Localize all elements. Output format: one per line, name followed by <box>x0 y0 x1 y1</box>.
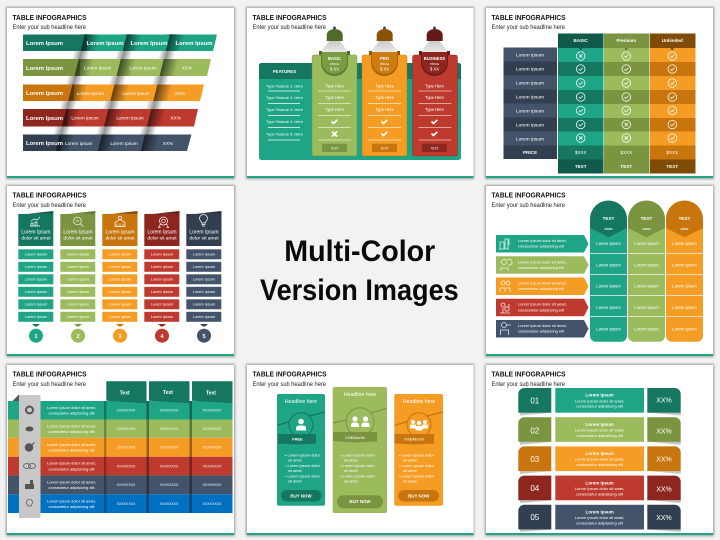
card: team: XX$/Month <box>404 436 424 442</box>
cell values: Lorem Ipsum <box>176 41 212 47</box>
center title <box>260 235 459 307</box>
feature dividers <box>268 90 300 140</box>
column 3: Lorem Ipsum <box>109 265 131 269</box>
row descriptions: consectetur adipisicing elit <box>49 429 95 434</box>
arrow icons <box>499 239 512 335</box>
row 05 <box>518 505 681 530</box>
column 4: Lorem Ipsum <box>147 230 177 236</box>
column: basic <box>558 34 604 174</box>
column text teal: Lorem Ipsum <box>596 305 621 310</box>
row 03: Lorem Ipsum <box>585 451 614 456</box>
row 01: 01 <box>530 396 540 406</box>
card: monthly: XX$/Month <box>345 435 365 440</box>
cell values: XX% <box>182 65 192 70</box>
row 01: XX% <box>656 398 672 404</box>
column 1: Lorem Ipsum <box>25 278 47 282</box>
sub headline: Enter your sub headline here <box>492 382 566 388</box>
plan: business: Type Here <box>425 107 445 112</box>
feature list: Type Feature 4: Here <box>266 119 303 124</box>
column: basic: TEXT <box>575 164 587 169</box>
column text green <box>628 200 665 342</box>
column 4: Lorem Ipsum <box>151 303 173 307</box>
column 2: Lorem Ipsum <box>67 265 89 269</box>
row descriptions: Lorem Ipsum dolor sit amet, <box>47 461 96 466</box>
row labels column: Lorem Ipsum <box>516 108 544 114</box>
arrow text <box>518 238 567 334</box>
color rows <box>8 401 232 513</box>
column text green: TEXT <box>641 216 653 221</box>
column 3: Lorem Ipsum <box>105 230 135 236</box>
plan: basic: Type Here <box>325 84 345 88</box>
card: monthly: BUY NOW <box>349 499 371 504</box>
column text teal: Lorem Ipsum <box>596 241 621 246</box>
card: monthly: sit amet <box>344 479 359 484</box>
column 2: dolor sit amet <box>63 236 93 242</box>
column 3: Lorem Ipsum <box>109 278 131 282</box>
plan: basic: Type Here <box>325 95 345 100</box>
cell values <box>117 408 222 506</box>
cell values: XXXXXXXX <box>117 408 136 412</box>
sub headline: Enter your sub headline here <box>252 382 327 388</box>
column text orange: Lorem Ipsum <box>672 262 697 268</box>
row labels column: Lorem Ipsum <box>516 80 544 86</box>
plan: pro: Type Here <box>375 95 395 100</box>
header columns: Text <box>163 390 173 396</box>
row labels column: Lorem Ipsum <box>516 66 544 72</box>
sub headline: Enter your sub headline here <box>492 203 566 209</box>
row 05: 05 <box>530 513 540 522</box>
heading: TABLE INFOGRAPHICS <box>12 13 86 22</box>
row 01: consectetur adipisicing elit <box>576 404 624 409</box>
row descriptions <box>47 405 96 509</box>
card: free: sit amet <box>288 458 303 463</box>
plan: pro: TEXT <box>380 146 389 150</box>
cell values: XXXXXXXX <box>203 427 222 431</box>
sub headline: Enter your sub headline here <box>252 25 327 31</box>
row labels: Lorem Ipsum <box>26 66 63 72</box>
card: free: sit amet <box>288 468 303 473</box>
plan: basic: TEXT <box>330 146 339 150</box>
row 05: Lorem Ipsum dolor sit amet, <box>575 515 624 520</box>
row 01: Lorem Ipsum dolor sit amet, <box>575 398 624 403</box>
sub headline: Enter your sub headline here <box>12 382 87 388</box>
column 5 <box>186 211 222 343</box>
arrow text: Lorem Ipsum dolor sit amet, <box>518 238 567 243</box>
plan: basic: $ XX <box>330 66 339 72</box>
row 03: XX% <box>656 456 672 464</box>
card: free: BUY NOW <box>290 493 312 498</box>
card: team: • Lorem Ipsum dolor <box>399 452 435 458</box>
column 5: 5 <box>202 334 206 340</box>
plan: basic: BASIC <box>328 56 341 61</box>
column text teal: TEXT <box>603 216 615 221</box>
row 05: XX% <box>656 515 672 522</box>
column 1: Lorem Ipsum <box>25 315 47 319</box>
column 1: Lorem Ipsum <box>25 253 47 257</box>
cell values: Lorem Ipsum <box>116 116 144 121</box>
row 04: 04 <box>530 484 540 493</box>
arrow text: consectetur adipisicing elit <box>518 286 565 291</box>
column 5: Lorem Ipsum <box>193 290 215 294</box>
column 5: Lorem Ipsum <box>193 315 215 319</box>
card: monthly: sit amet <box>344 468 359 473</box>
column 5: Lorem Ipsum <box>189 230 219 236</box>
card: team: Headline here <box>403 399 435 405</box>
sub headline: Enter your sub headline here <box>492 25 566 31</box>
column text green: Lorem Ipsum <box>634 326 659 332</box>
plan: business: Type Here <box>425 95 445 100</box>
column: premium: $XXX <box>620 150 632 155</box>
column 2 <box>60 211 95 343</box>
column 5: dolor sit amet <box>189 236 219 242</box>
row descriptions: consectetur adipisicing elit <box>49 448 95 452</box>
column 3: Lorem Ipsum <box>109 303 131 307</box>
check and cross icons <box>576 52 677 142</box>
plan: business <box>412 26 458 156</box>
wedge shadows <box>520 413 681 532</box>
card: monthly: sit amet <box>344 458 359 463</box>
card: monthly <box>333 387 387 513</box>
column 5: Lorem Ipsum <box>193 265 215 269</box>
column text teal: Lorem Ipsum <box>596 262 621 268</box>
column: unlimited: TEXT <box>666 164 678 169</box>
column: premium <box>604 34 650 174</box>
row labels: Lorem Ipsum <box>26 141 63 147</box>
cell values: XX% <box>170 116 181 121</box>
sub headline: Enter your sub headline here <box>12 25 87 31</box>
column text teal: Lorem Ipsum <box>596 326 621 332</box>
row descriptions: Lorem Ipsum dolor sit amet, <box>47 442 96 447</box>
heading: TABLE INFOGRAPHICS <box>492 13 566 22</box>
column 4: Lorem Ipsum <box>151 315 173 319</box>
row 04: Lorem Ipsum dolor sit amet, <box>575 486 624 491</box>
panel: pricing lamps table <box>246 7 474 179</box>
column: premium: TEXT <box>620 164 632 169</box>
column text orange: Lorem Ipsum <box>672 305 697 310</box>
heading: TABLE INFOGRAPHICS <box>492 370 566 379</box>
row descriptions: Lorem Ipsum dolor sit amet, <box>47 423 96 428</box>
features table background: FEATURES <box>273 69 296 74</box>
panel: pricing cards <box>246 364 474 536</box>
column 1 <box>18 211 53 343</box>
column 1: Lorem Ipsum <box>25 265 47 269</box>
column 4: Lorem Ipsum <box>151 253 173 257</box>
cell values: XXXXXXXX <box>203 464 222 468</box>
column: premium: Premium <box>616 38 636 43</box>
cell values: Lorem Ipsum <box>77 91 104 96</box>
cell values: XX% <box>175 91 185 96</box>
row 04: Lorem Ipsum <box>585 480 614 485</box>
cell values: XXXXXXXX <box>160 427 179 431</box>
column 4: dolor sit amet <box>147 236 177 242</box>
panel: five numbered columns <box>6 185 235 357</box>
column 3: dolor sit amet <box>105 236 135 242</box>
plan: business: Type Here <box>425 84 445 88</box>
card: monthly: • Lorem Ipsum dolor <box>340 463 376 468</box>
column 4: Lorem Ipsum <box>151 265 173 269</box>
features table background <box>259 63 461 160</box>
fold shadows between rows <box>49 34 180 151</box>
row 03: 03 <box>530 455 540 464</box>
column 1: Lorem Ipsum <box>25 290 47 294</box>
heading: TABLE INFOGRAPHICS <box>252 13 326 22</box>
plan: pro: Type Here <box>375 84 395 88</box>
plan: business: TEXT <box>430 146 439 150</box>
column 4: 4 <box>160 334 164 340</box>
column text green: Lorem Ipsum <box>634 305 659 310</box>
cell values: Lorem Ipsum <box>86 41 124 47</box>
plan: pro: $ XX <box>380 66 389 72</box>
panel: checklist comparison table <box>485 7 714 179</box>
column 4: Lorem Ipsum <box>151 278 173 282</box>
row 04 <box>518 476 681 500</box>
cell values: XXXXXXXX <box>203 408 222 412</box>
row labels column: Lorem Ipsum <box>516 136 544 142</box>
plan: basic <box>312 26 357 156</box>
row labels column <box>504 48 557 159</box>
cell values: XXXXXXXX <box>117 464 136 468</box>
plan: business: PRICE <box>430 62 439 66</box>
arrow text: consectetur adipisicing elit <box>518 329 565 334</box>
row 04: consectetur adipisicing elit <box>576 491 624 496</box>
card: monthly: Headline here <box>344 392 376 398</box>
card: free: • Lorem Ipsum dolor <box>285 452 321 458</box>
column 2: Lorem Ipsum <box>63 230 93 236</box>
header columns: Text <box>120 390 130 396</box>
panel: full-width colored rows <box>6 364 235 536</box>
arrow text: consectetur adipisicing elit <box>518 244 565 249</box>
cell values: XXXXXXXX <box>117 427 136 431</box>
row 02: XX% <box>656 428 672 436</box>
feature list: Type Feature 1: Here <box>266 84 303 88</box>
column 3: Lorem Ipsum <box>109 290 131 294</box>
column 2: 2 <box>76 334 80 340</box>
cell values: XXXXXXXX <box>160 464 179 468</box>
cell values: Lorem Ipsum <box>110 141 138 146</box>
column: basic: BASIC <box>574 38 589 43</box>
cell values: XXXXXXXX <box>117 483 136 487</box>
row labels: Lorem Ipsum <box>26 91 63 97</box>
column 3 <box>102 211 138 343</box>
column 5: Lorem Ipsum <box>193 278 215 282</box>
column 3: Lorem Ipsum <box>109 315 131 319</box>
header columns: Text <box>206 390 216 396</box>
column: unlimited: Unlimited <box>662 38 683 43</box>
row 05: consectetur adipisicing elit <box>576 520 624 526</box>
arrow text: Lorem Ipsum dolor sit amet, <box>518 259 567 264</box>
arrow text: consectetur adipisicing elit <box>518 265 565 270</box>
fold corner <box>12 394 19 401</box>
cell values: XX% <box>163 141 173 146</box>
column 5: Lorem Ipsum <box>193 303 215 307</box>
card: team: • Lorem Ipsum dolor <box>399 463 435 468</box>
plan: basic: PRICE <box>330 62 339 66</box>
column text teal <box>590 201 627 342</box>
panel: numbered rows with percentages <box>485 364 714 536</box>
cell values: XXXXXXXX <box>160 446 179 450</box>
column text green: Lorem Ipsum <box>634 241 659 246</box>
arrow rows <box>496 235 588 338</box>
row 03: consectetur adipisicing elit <box>576 462 624 467</box>
column text orange: TEXT <box>679 216 691 221</box>
column 2: Lorem Ipsum <box>67 290 89 294</box>
row 01: Lorem Ipsum <box>585 393 614 398</box>
column 1: dolor sit amet <box>21 236 51 242</box>
feature list: Type Feature 3: Here <box>266 107 303 112</box>
panel: arrows into domed columns <box>485 185 714 357</box>
row descriptions: consectetur adipisicing elit <box>49 485 95 490</box>
row descriptions: consectetur adipisicing elit <box>49 504 95 509</box>
row 02: consectetur adipisicing elit <box>576 433 624 438</box>
feature list: Type Feature 2: Here <box>266 95 303 100</box>
plan: business: $ XX <box>430 66 439 72</box>
column: basic: $XXX <box>575 150 587 155</box>
colored rows <box>23 34 217 151</box>
column text orange <box>666 200 703 342</box>
card: free: • Lorem Ipsum dolor <box>285 463 321 468</box>
card: monthly: • Lorem Ipsum dolor <box>340 452 376 458</box>
feature list <box>266 84 303 136</box>
row labels <box>26 41 63 147</box>
card: team: • Lorem Ipsum dolor <box>399 474 435 478</box>
column 4: Lorem Ipsum <box>151 290 173 294</box>
cell values: XXXXXXXX <box>203 446 222 450</box>
row 01 <box>518 388 681 413</box>
column: unlimited: $XXX <box>666 150 678 155</box>
card: team <box>394 394 443 506</box>
plan: business: BUSINESS <box>424 56 445 61</box>
column 2: Lorem Ipsum <box>67 278 89 282</box>
cell values: XXXXXXXX <box>160 502 179 506</box>
column 4 <box>144 211 180 343</box>
cell values: XXXXXXXX <box>160 483 179 487</box>
card: free: sit amet <box>288 479 303 484</box>
gray icon strip <box>19 395 40 518</box>
plan: pro: PRICE <box>380 62 389 66</box>
row labels: Lorem Ipsum <box>26 41 63 47</box>
row labels column: Lorem Ipsum <box>516 52 544 58</box>
column 2: Lorem Ipsum <box>67 253 89 257</box>
row descriptions: consectetur adipisicing elit <box>49 410 95 416</box>
header columns <box>106 381 232 403</box>
center title: Version Images <box>260 274 459 307</box>
row descriptions: Lorem Ipsum dolor sit amet, <box>47 498 96 503</box>
row 04: XX% <box>656 486 672 494</box>
column 1: Lorem Ipsum <box>25 303 47 307</box>
cell values: Lorem Ipsum <box>122 91 150 96</box>
cell values: Lorem Ipsum <box>130 41 168 47</box>
heading: TABLE INFOGRAPHICS <box>252 370 326 379</box>
feature list: Type Feature 5: Here <box>266 132 303 136</box>
arrow text: Lorem Ipsum dolor sit amet, <box>518 302 567 307</box>
card: free: • Lorem Ipsum dolor <box>285 474 321 478</box>
plan: pro: Type Here <box>375 107 395 112</box>
column 2: Lorem Ipsum <box>67 315 89 319</box>
column 2: Lorem Ipsum <box>67 303 89 307</box>
plan: pro: PRO <box>380 56 390 61</box>
cell values: Lorem Ipsum <box>65 141 92 146</box>
heading: TABLE INFOGRAPHICS <box>12 370 86 379</box>
sub headline: Enter your sub headline here <box>12 203 87 209</box>
column shadows <box>104 401 192 513</box>
row 05: Lorem Ipsum <box>585 510 614 514</box>
cell values: XXXXXXXX <box>203 483 222 487</box>
column 1: 1 <box>34 334 38 340</box>
column 3: Lorem Ipsum <box>109 253 131 257</box>
heading: TABLE INFOGRAPHICS <box>12 191 86 200</box>
plan: pro <box>362 26 407 156</box>
column text orange: Lorem Ipsum <box>672 241 697 246</box>
column 1: Lorem Ipsum <box>21 230 51 236</box>
column text teal: Lorem Ipsum <box>596 284 621 288</box>
column 5: Lorem Ipsum <box>193 253 215 257</box>
cell values: Lorem Ipsum <box>84 65 111 70</box>
column text orange: Lorem Ipsum <box>672 284 697 288</box>
column 3: 3 <box>118 334 122 340</box>
row 02: Lorem Ipsum <box>585 422 614 427</box>
card: team: sit amet, <box>403 479 418 484</box>
arrow text: Lorem Ipsum dolor sit amet, <box>518 323 567 328</box>
card: free: Headline here <box>285 399 317 405</box>
card: team: BUY NOW <box>408 493 430 498</box>
row descriptions: Lorem Ipsum dolor sit amet, <box>47 405 96 410</box>
column text green: Lorem Ipsum <box>634 284 659 288</box>
row descriptions: consectetur adipisicing elit <box>49 466 95 471</box>
column text orange: Lorem Ipsum <box>672 326 697 332</box>
row labels column: Lorem Ipsum <box>516 94 544 100</box>
column: unlimited <box>650 34 696 174</box>
cell values: XXXXXXXX <box>203 502 222 506</box>
row 02 <box>518 417 681 442</box>
arrow text: consectetur adipisicing elit <box>518 307 565 312</box>
heading: TABLE INFOGRAPHICS <box>492 191 566 200</box>
row 03 <box>518 446 681 471</box>
column text green: Lorem Ipsum <box>634 262 659 268</box>
plan: basic: Type Here <box>325 107 345 112</box>
cell values: XXXXXXXX <box>160 408 179 412</box>
row 02: Lorem Ipsum dolor sit amet, <box>575 428 624 432</box>
row labels column: Lorem Ipsum <box>516 122 544 128</box>
panel: slanted table <box>6 7 235 179</box>
cell values: Lorem Ipsum <box>71 116 99 121</box>
dark left cells and folds <box>23 34 185 152</box>
row labels column: PRICE <box>523 150 537 155</box>
cell values: Lorem Ipsum <box>129 65 157 70</box>
arrow text: Lorem Ipsum dolor sit amet, <box>518 280 567 285</box>
row descriptions: Lorem Ipsum dolor sit amet, <box>47 480 96 484</box>
row 02: 02 <box>530 426 540 436</box>
center title: Multi-Color <box>284 235 436 268</box>
card: monthly: • Lorem Ipsum dolor <box>340 474 376 478</box>
card: team: sit amet <box>403 468 418 473</box>
card: free <box>277 394 325 506</box>
row 03: Lorem Ipsum dolor sit amet, <box>575 457 624 462</box>
cell values: XXXXXXXX <box>117 502 136 506</box>
row labels: Lorem Ipsum <box>26 116 63 122</box>
cell values <box>65 41 212 146</box>
cell values: XXXXXXXX <box>117 446 136 450</box>
card: free: FREE <box>292 436 303 442</box>
card: team: sit amet <box>403 458 418 463</box>
